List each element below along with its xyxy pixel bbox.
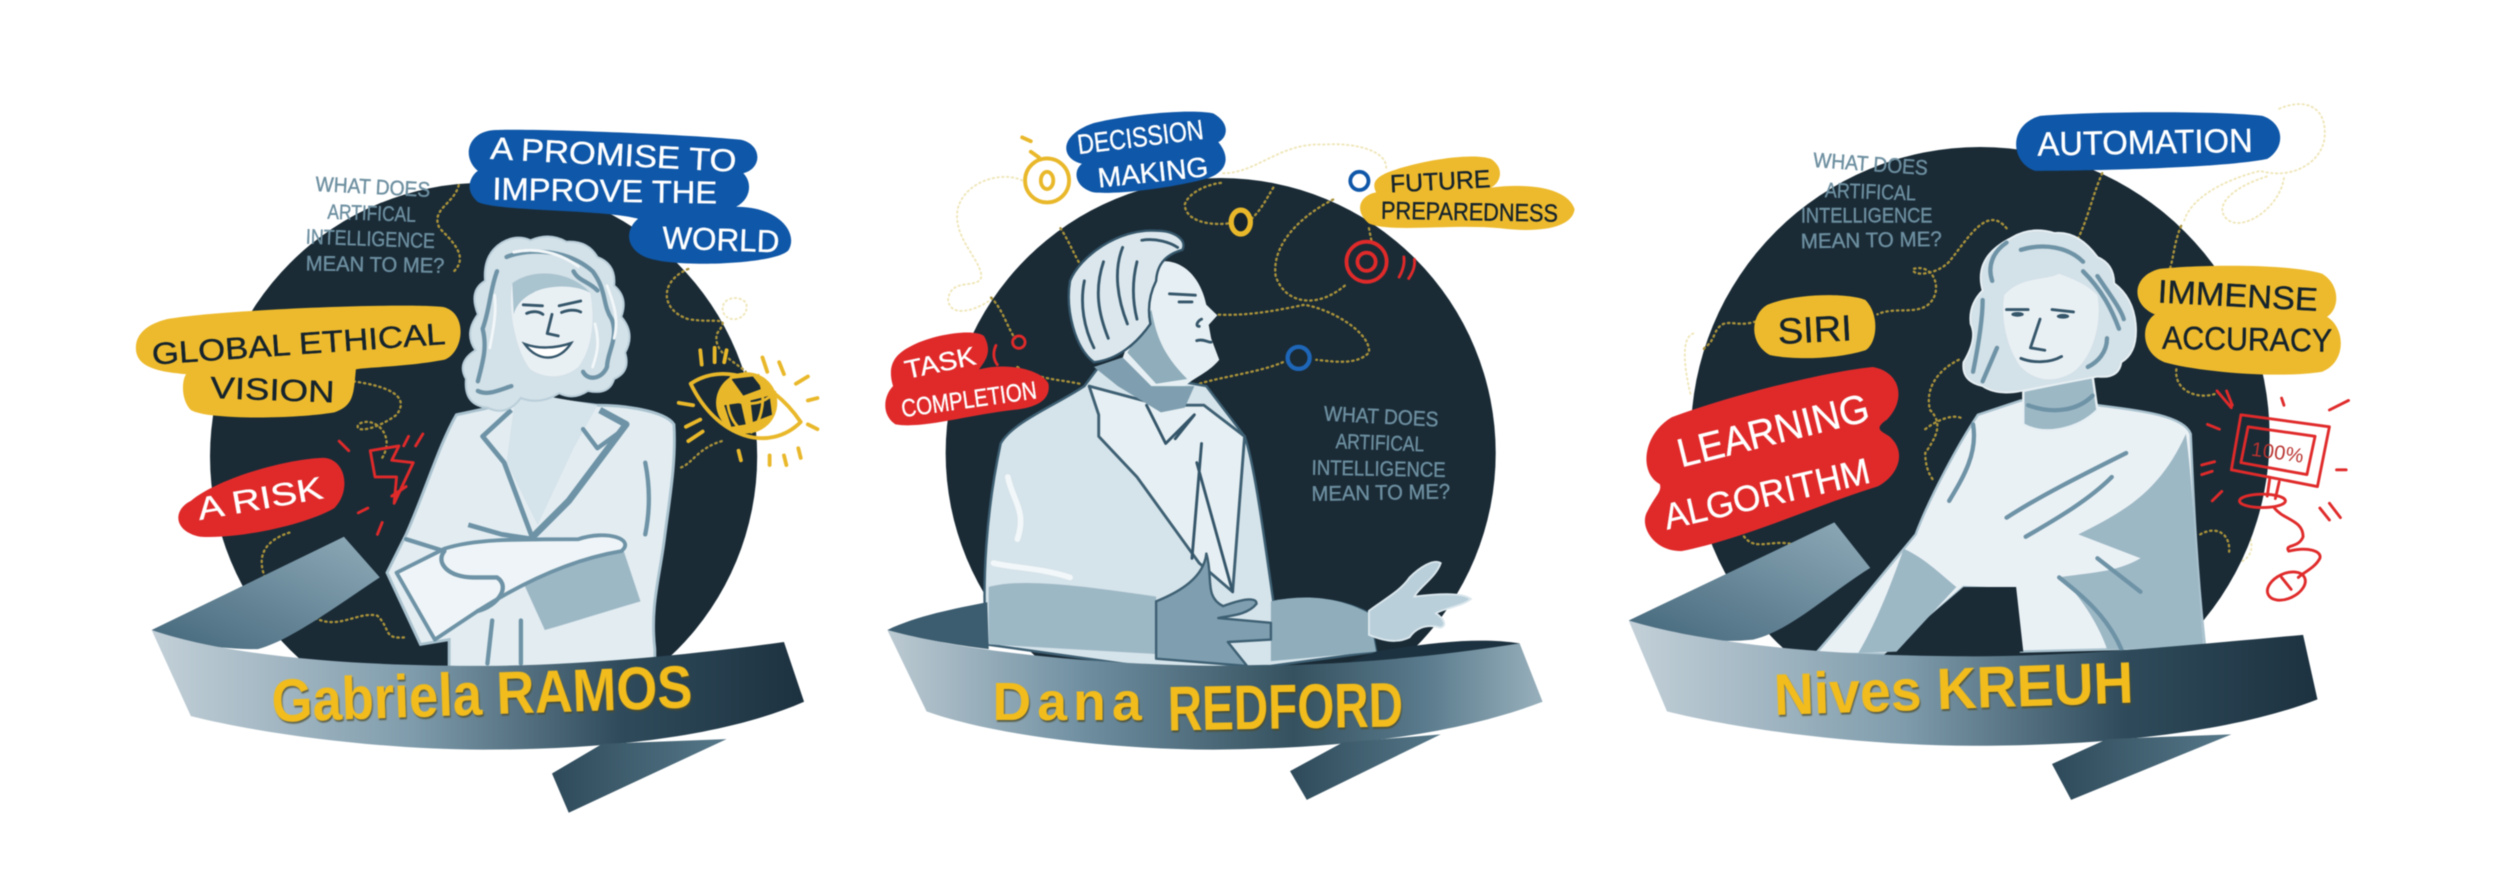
icon: yellow ring — [1231, 210, 1250, 234]
question text: ARTIFICAL — [1335, 430, 1425, 456]
bubble: task completion: TASK — [902, 342, 978, 385]
question text — [1801, 149, 1942, 253]
ribbon left fold — [887, 602, 989, 649]
icon: lightning bolt — [339, 434, 423, 534]
icon: eye with globe — [679, 348, 817, 465]
question text — [305, 173, 445, 278]
icon: blue ring lower — [1288, 347, 1310, 369]
name: Nives Kreuh: Nives KREUH — [1773, 651, 2134, 728]
panel: Gabriela Ramos — [136, 130, 817, 813]
dotted connectors on white — [948, 144, 1386, 311]
bubble: immense accuracy: IMMENSE — [2157, 273, 2319, 318]
question text: WHAT DOES — [315, 173, 431, 202]
name: Dana Redford: Dana — [993, 673, 1143, 732]
question text: INTELLIGENCE — [1801, 205, 1932, 228]
bubble: future preparedness — [1360, 156, 1575, 230]
bubble: learning algorithm: ALGORITHM — [1660, 450, 1874, 537]
portrait: Gabriela Ramos — [387, 236, 674, 673]
ribbon main band — [887, 630, 1543, 750]
question text: WHAT DOES — [1812, 149, 1929, 180]
name: Dana Redford — [993, 670, 1404, 744]
icon: red target — [1346, 242, 1415, 282]
bubble: task completion — [885, 333, 1049, 425]
bubble: siri — [1754, 295, 1875, 358]
bubble: future preparedness: PREPAREDNESS — [1381, 197, 1558, 228]
dark circle background — [210, 183, 757, 730]
dotted connectors on white — [1685, 104, 2325, 565]
icon: computer with mouse: 100% — [2250, 439, 2305, 468]
question text: ARTIFICAL — [327, 201, 416, 227]
dotted connector lines — [1704, 173, 2229, 554]
bubble: automation — [2016, 112, 2280, 171]
icon: blue ring — [1350, 172, 1368, 190]
ribbon main band — [1629, 620, 2317, 746]
question text: MEAN TO ME? — [1311, 480, 1450, 506]
bubble: siri: SIRI — [1777, 307, 1853, 352]
bubble: decission making — [1066, 112, 1226, 194]
bubble: a promise to improve the world: WORLD — [662, 219, 780, 259]
ribbon main band — [152, 630, 804, 750]
bubble: a promise to improve the world — [469, 130, 791, 264]
bubble: decission making: MAKING — [1096, 151, 1210, 194]
ribbon back tail — [152, 537, 380, 649]
bubble: future preparedness: FUTURE — [1389, 165, 1491, 198]
panel: Nives Kreuh — [1629, 104, 2349, 800]
bubble: immense accuracy: ACCURACY — [2162, 320, 2332, 359]
question text: INTELLIGENCE — [305, 226, 435, 253]
question text: INTELLIGENCE — [1311, 457, 1446, 482]
bubble: automation: AUTOMATION — [2037, 123, 2253, 164]
ribbon right fold — [1328, 641, 1520, 671]
ribbon lower tail — [552, 739, 727, 813]
question text: WHAT DOES — [1323, 403, 1439, 432]
ribbon lower tail — [1290, 734, 1441, 800]
bubble: global ethical vision: GLOBAL ETHICAL — [151, 317, 447, 372]
question text: ARTIFICAL — [1825, 179, 1916, 205]
question text — [1311, 403, 1450, 506]
icon: yellow target — [1022, 137, 1069, 202]
ribbon back tail — [1629, 522, 1870, 641]
icon: computer with mouse — [2202, 391, 2349, 606]
bubble: a risk: A RISK — [194, 469, 326, 527]
name: Gabriela Ramos: Gabriela RAMOS — [270, 652, 693, 735]
bubble: global ethical vision — [136, 306, 461, 418]
bubble: task completion: COMPLETION — [900, 376, 1038, 423]
dotted connector lines — [991, 183, 1371, 384]
bubble: immense accuracy — [2137, 266, 2341, 375]
dark circle background — [946, 178, 1496, 728]
portrait: Nives Kreuh — [1815, 230, 2205, 656]
bubble: learning algorithm — [1645, 367, 1899, 551]
name: Dana Redford: REDFORD — [1167, 670, 1404, 744]
question text: MEAN TO ME? — [306, 252, 445, 278]
bubble: global ethical vision: VISION — [210, 371, 335, 409]
dotted connector lines — [262, 185, 747, 638]
bubble: a risk — [178, 458, 344, 537]
portrait: Dana Redford — [985, 231, 1471, 668]
bubble: a promise to improve the world: A PROMISE TO — [489, 130, 737, 179]
bubble: a promise to improve the world: IMPROVE THE — [492, 171, 717, 210]
ribbon lower tail — [2052, 734, 2231, 800]
icon: small red ring — [994, 336, 1025, 365]
bubble: decission making: DECISSION — [1076, 114, 1205, 160]
bubble: learning algorithm: LEARNING — [1673, 385, 1874, 476]
panel: Dana Redford — [885, 112, 1575, 800]
question text: MEAN TO ME? — [1801, 228, 1942, 253]
dark circle background — [1691, 147, 2270, 726]
